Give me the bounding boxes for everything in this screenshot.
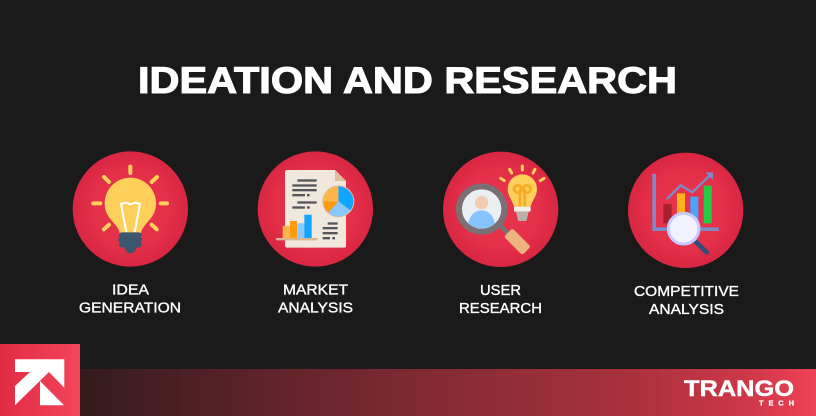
label: competitive analysis: COMPETITIVE xyxy=(634,284,739,300)
icon: light bulb xyxy=(73,151,188,267)
brand wordmark: Trango Tech: TECH xyxy=(759,398,794,408)
icon: magnifier over user with bulb xyxy=(443,152,558,267)
label: idea generation xyxy=(79,282,181,316)
label: idea generation: IDEA xyxy=(112,282,149,298)
label: competitive analysis xyxy=(634,284,739,318)
label: competitive analysis: ANALYSIS xyxy=(649,302,724,318)
brand wordmark: Trango Tech xyxy=(684,376,794,408)
icon: report with charts xyxy=(258,151,373,267)
label: market analysis: MARKET xyxy=(283,282,348,298)
footer gradient bar xyxy=(80,369,816,416)
item: idea generation xyxy=(73,151,188,316)
logo mark: red square with arrow xyxy=(0,344,80,416)
icon: bar chart with magnifier xyxy=(628,153,743,268)
label: user research: RESEARCH xyxy=(459,301,542,317)
label: user research xyxy=(459,283,542,317)
item: user research xyxy=(443,152,558,317)
item: market analysis xyxy=(258,151,373,316)
label: market analysis: ANALYSIS xyxy=(278,300,353,316)
label: user research: USER xyxy=(480,283,521,299)
label: market analysis xyxy=(278,282,353,316)
label: idea generation: GENERATION xyxy=(79,300,181,316)
title: IDEATION AND RESEARCH xyxy=(138,60,677,101)
item: competitive analysis xyxy=(628,153,743,318)
brand wordmark: Trango Tech: TRANGO xyxy=(684,376,794,401)
